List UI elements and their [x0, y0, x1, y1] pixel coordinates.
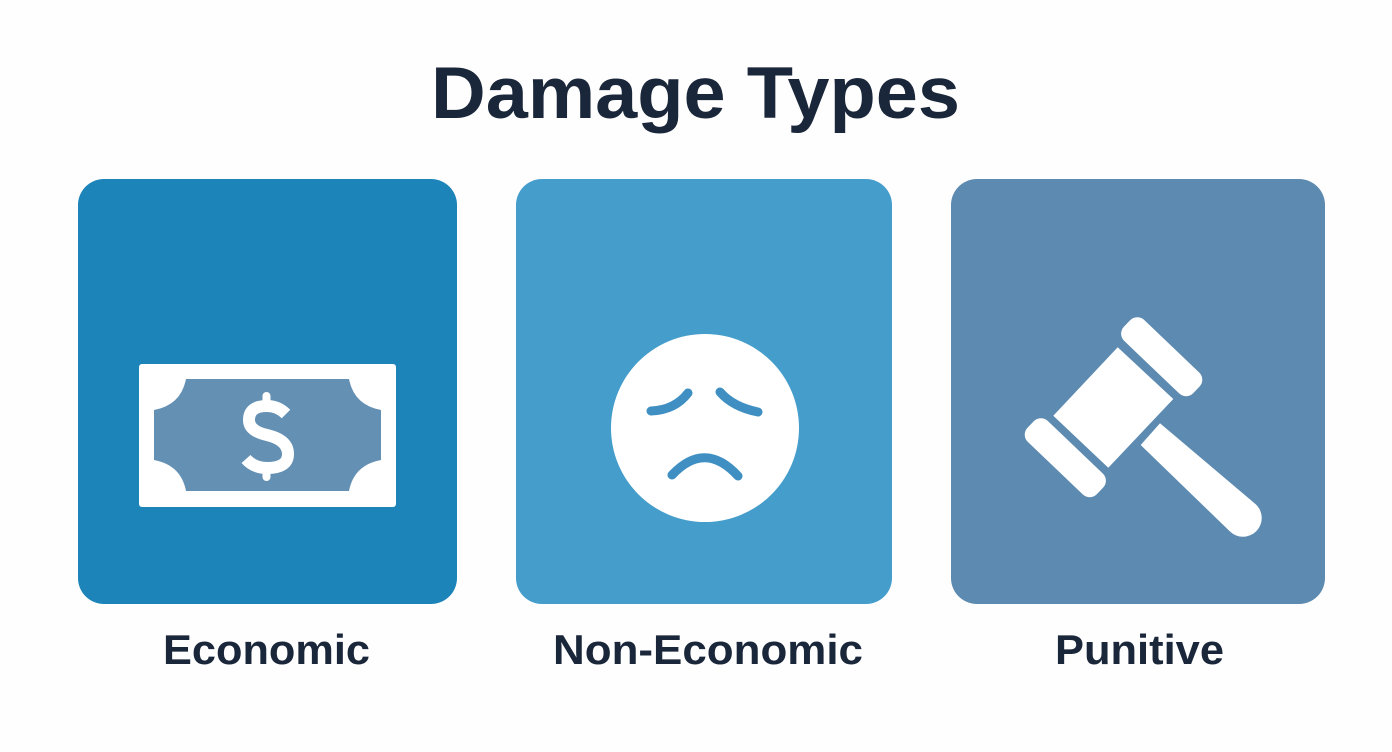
panel: punitive: [951, 179, 1325, 673]
panel: non-economic: [516, 179, 892, 673]
icon: gavel: [1021, 313, 1262, 537]
label: non-economic: Non-Economic: [553, 626, 863, 673]
icon: sad face: [611, 334, 799, 522]
label: punitive: Punitive: [1055, 626, 1224, 673]
panel: economic: [78, 179, 457, 673]
icon: banknote: [139, 364, 396, 507]
label: economic: Economic: [163, 626, 370, 673]
title: Damage Types: [431, 53, 960, 134]
